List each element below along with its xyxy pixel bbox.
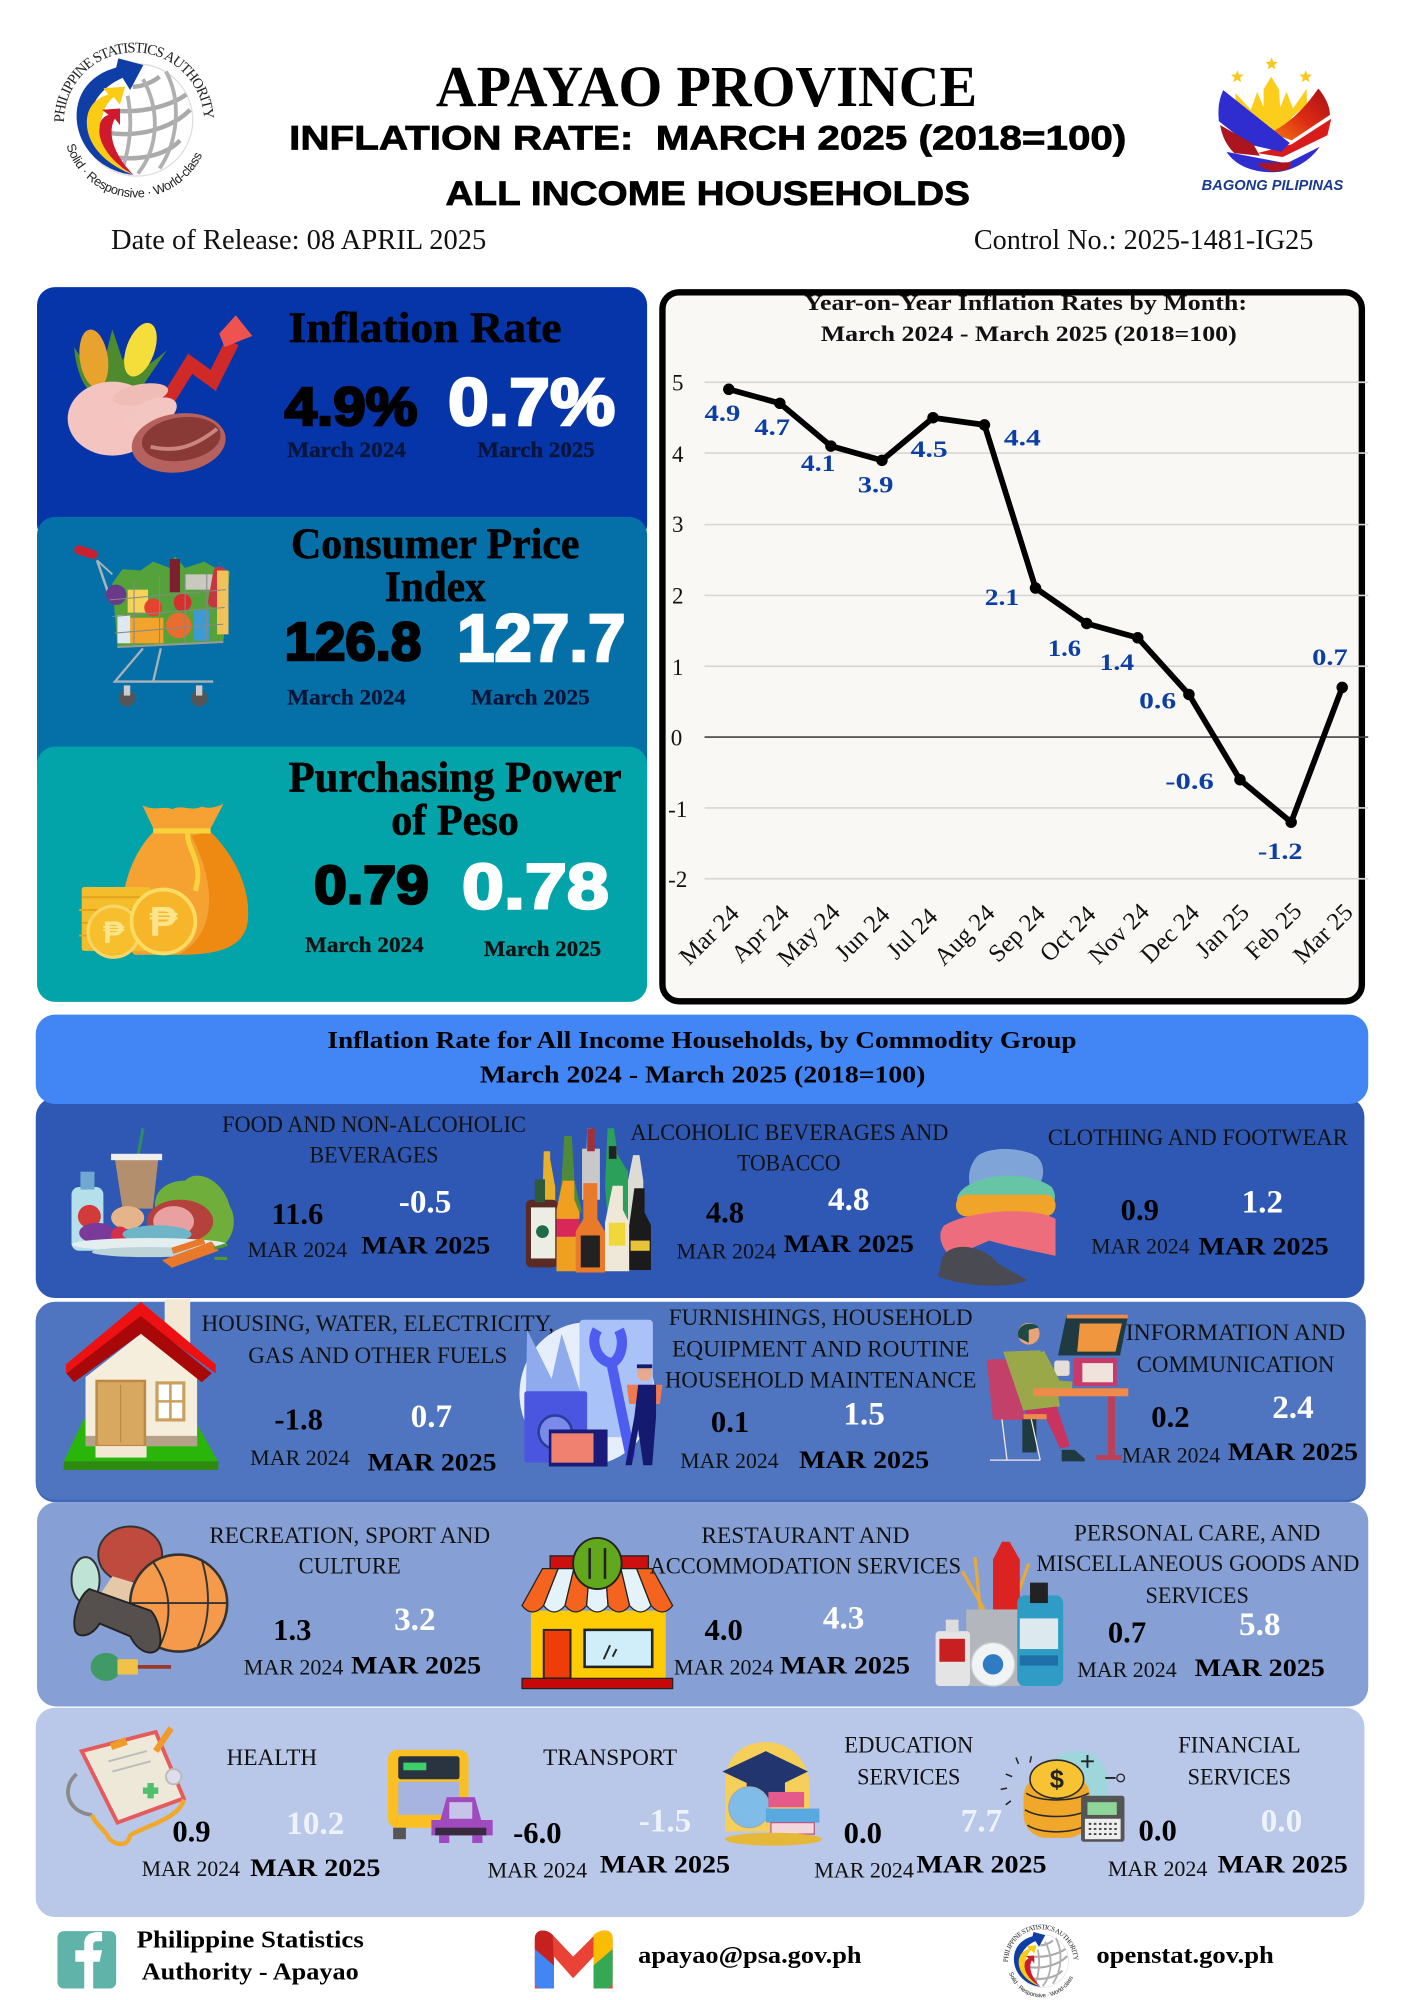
y axis labels (668, 371, 687, 892)
email text: apayao@psa.gov.ph (638, 1942, 862, 1969)
icon: clothes stack and shoes (938, 1149, 1056, 1286)
label 2024: MAR 2024 (680, 1449, 779, 1473)
label 2025: MAR 2025 (351, 1650, 481, 1679)
y axis labels: -2 (668, 867, 687, 892)
label: FURNISHINGS, HOUSEHOLD (669, 1305, 973, 1330)
data labels: 4.1 (801, 451, 835, 476)
value 2024: 1.3 (273, 1613, 311, 1647)
heading: of Peso (391, 797, 519, 845)
icon: food with rising arrow (68, 315, 252, 479)
x axis labels: Feb 25 (1240, 898, 1307, 965)
x axis labels: Oct 24 (1035, 900, 1102, 967)
commodity: food and non-alcoholic beverages (71, 1112, 526, 1265)
value 2024: 0.9 (1121, 1193, 1159, 1227)
footer: website (1003, 1924, 1274, 1998)
label 2025: MAR 2025 (1198, 1232, 1329, 1261)
panel: purchasing power of peso (37, 747, 647, 1002)
icon: clipboard and stethoscope (68, 1728, 184, 1844)
data labels: 4.4 (1004, 425, 1042, 450)
label 2025: MAR 2025 (799, 1445, 929, 1474)
x axis labels (674, 898, 1359, 972)
label: SERVICES (857, 1764, 960, 1789)
label 2024: MAR 2024 (674, 1656, 774, 1680)
label: EQUIPMENT AND ROUTINE (672, 1337, 969, 1362)
logo: PSA small: Solid · Responsive · World-class (1010, 1972, 1073, 1998)
label (650, 1523, 961, 1579)
panel: inflation rate (37, 287, 647, 542)
label: March 2024: March 2024 (287, 438, 406, 462)
footer: email (535, 1931, 862, 1989)
icon: coins and calculator: $ (1050, 1766, 1064, 1794)
commodity: personal care and miscellaneous (936, 1521, 1359, 1686)
label (202, 1311, 554, 1368)
footer text: Authority - Apayao (142, 1959, 359, 1986)
value 2025: 0.0 (1261, 1803, 1302, 1840)
x axis labels: Jun 24 (830, 901, 896, 967)
label 2025: MAR 2025 (1195, 1653, 1325, 1682)
logo: PSA small: PHILIPPINE STATISTICS AUTHORITY (1003, 1924, 1078, 1962)
data labels: -0.6 (1165, 769, 1214, 794)
label 2025: MAR 2025 (780, 1650, 910, 1679)
label (1126, 1320, 1345, 1377)
data labels: 0.6 (1139, 688, 1176, 713)
icon: bottles (526, 1128, 651, 1272)
value 2024: 11.6 (271, 1197, 323, 1231)
icon: restaurant storefront (522, 1538, 673, 1689)
chart title: Year-on-Year Inflation Rates by Month: (804, 290, 1247, 315)
label 2024: MAR 2024 (676, 1239, 776, 1263)
icon: shopping cart (73, 544, 230, 706)
x axis labels: May 24 (772, 898, 846, 972)
label 2024: MAR 2024 (1091, 1234, 1190, 1258)
label 2024: MAR 2024 (248, 1238, 347, 1262)
label 2025: MAR 2025 (361, 1230, 490, 1259)
commodity: alcoholic beverages and tobacco (526, 1120, 948, 1272)
commodity: health (68, 1728, 380, 1882)
y axis labels: 4 (672, 442, 684, 467)
footer text (137, 1927, 364, 1986)
label 2025: MAR 2025 (1228, 1437, 1358, 1466)
value: March 2024: 4.9% (285, 377, 417, 437)
label: FOOD AND NON-ALCOHOLIC (222, 1112, 526, 1137)
y axis labels: -1 (668, 797, 687, 822)
label: RECREATION, SPORT AND (209, 1523, 490, 1548)
value 2025: 5.8 (1239, 1606, 1280, 1643)
label: GAS AND OTHER FUELS (248, 1343, 507, 1368)
label: FINANCIAL (1178, 1732, 1301, 1757)
label: EDUCATION (844, 1732, 974, 1757)
data labels (705, 401, 1348, 864)
label: March 2025: March 2025 (484, 937, 601, 961)
value 2024: 0.0 (1139, 1813, 1177, 1847)
heading: Inflation Rate (288, 304, 562, 352)
label (222, 1112, 526, 1168)
data labels: 0.7 (1312, 645, 1348, 670)
label 2025: MAR 2025 (1218, 1849, 1348, 1878)
data line (723, 384, 1348, 828)
section header (36, 1015, 1368, 1104)
label (209, 1523, 490, 1579)
label: COMMUNICATION (1137, 1352, 1335, 1377)
label: SERVICES (1146, 1583, 1249, 1608)
icon: money bag with coins: ₱ (149, 898, 178, 945)
label 2025: MAR 2025 (784, 1229, 914, 1258)
chart title (804, 290, 1247, 346)
label 2024: MAR 2024 (1122, 1444, 1220, 1468)
x axis labels: Aug 24 (929, 899, 1001, 971)
icon: bus and car (388, 1750, 493, 1843)
heading: Index (385, 563, 486, 611)
value 2024: 4.8 (706, 1196, 744, 1230)
subtitle: all income households: ALL INCOME HOUSEHOLDS (445, 175, 970, 213)
label: SERVICES (1188, 1764, 1291, 1789)
data labels: -1.2 (1258, 839, 1303, 864)
icon: person at desk (987, 1315, 1128, 1461)
icon: graduation cap and books (722, 1742, 822, 1846)
commodity: housing, water, electricity (64, 1299, 554, 1476)
value 2025: 4.3 (823, 1600, 864, 1637)
y axis labels: 1 (672, 655, 683, 680)
footer text: Philippine Statistics (137, 1927, 364, 1954)
label: TOBACCO (737, 1150, 840, 1175)
value 2024: 0.7 (1108, 1616, 1146, 1650)
x axis labels: Jan 25 (1190, 899, 1255, 964)
icon: food plate and drink (71, 1128, 234, 1265)
x axis labels: Sep 24 (983, 900, 1051, 968)
logo: Philippine Statistics Authority (54, 42, 214, 198)
control number: Control No.: 2025-1481-IG25 (974, 225, 1313, 256)
release date: Date of Release: 08 APRIL 2025 (111, 225, 486, 256)
icon: appliances and repairman (519, 1320, 662, 1466)
icon: facebook (57, 1931, 116, 1989)
x axis labels: Dec 24 (1136, 899, 1205, 969)
commodity: recreation, sport and culture (71, 1523, 490, 1681)
chart title: March 2024 - March 2025 (2018=100) (821, 321, 1237, 346)
label: MISCELLANEOUS GOODS AND (1036, 1551, 1359, 1576)
value 2025: 1.2 (1242, 1184, 1283, 1221)
x axis labels: Nov 24 (1083, 898, 1155, 970)
value 2024: 4.0 (705, 1613, 743, 1647)
label (1178, 1732, 1301, 1789)
value 2024: -1.8 (274, 1402, 323, 1436)
y axis labels: 0 (671, 725, 682, 750)
data labels: 4.9 (705, 401, 740, 426)
panel: commodity row 3 background (37, 1502, 1368, 1706)
panel: commodity row 4 background (36, 1708, 1364, 1917)
label 2025: MAR 2025 (600, 1849, 730, 1878)
value 2025: 4.8 (828, 1181, 870, 1218)
label: HOUSING, WATER, ELECTRICITY, (202, 1311, 554, 1336)
label: RESTAURANT AND (701, 1523, 909, 1548)
label: March 2025: March 2025 (477, 438, 595, 462)
label 2024: MAR 2024 (250, 1446, 350, 1470)
value 2024: -6.0 (513, 1816, 562, 1850)
section header: March 2024 - March 2025 (2018=100) (480, 1061, 925, 1088)
website text: openstat.gov.ph (1096, 1942, 1274, 1969)
commodity: transport (388, 1745, 730, 1882)
heading (291, 520, 579, 611)
panel: commodity row 2 fill (36, 1302, 1366, 1500)
title: APAYAO PROVINCE (436, 54, 977, 119)
data labels: 3.9 (858, 473, 893, 498)
value 2025: -0.5 (399, 1184, 451, 1221)
data labels: 1.4 (1100, 650, 1135, 675)
label 2024: MAR 2024 (142, 1857, 240, 1881)
label (665, 1305, 976, 1392)
commodity: furnishings, household equipment (519, 1305, 976, 1474)
icon: house (64, 1299, 218, 1470)
label (844, 1732, 974, 1789)
subtitle: inflation rate: INFLATION RATE: MARCH 2025 (2018=100) (289, 119, 1126, 157)
label 2025: MAR 2025 (368, 1447, 497, 1476)
footer: facebook (57, 1927, 364, 1989)
icon: coins and calculator (1001, 1751, 1124, 1842)
label: CLOTHING AND FOOTWEAR (1048, 1125, 1348, 1150)
section header: Inflation Rate for All Income Households, by Commodity Group (327, 1027, 1077, 1054)
panel: year-on-year line chart (662, 290, 1368, 1001)
y axis labels: 2 (672, 584, 683, 609)
value: March 2024: 0.79 (314, 856, 429, 916)
commodity: financial services (1001, 1732, 1348, 1881)
value: March 2025: 127.7 (457, 602, 625, 676)
label 2025: MAR 2025 (250, 1853, 380, 1882)
commodity: information and communication (987, 1315, 1358, 1468)
icon: toiletries (936, 1542, 1063, 1686)
label: March 2024: March 2024 (305, 933, 424, 957)
logo: Bagong Pilipinas (1202, 57, 1344, 194)
value 2025: 2.4 (1272, 1389, 1314, 1426)
label: PERSONAL CARE, AND (1074, 1521, 1320, 1546)
data labels: 1.6 (1048, 636, 1081, 661)
icon: gmail (535, 1931, 613, 1989)
icon: money bag with coins: ₱ (103, 914, 125, 950)
value: March 2025: 0.78 (462, 851, 609, 923)
label: TRANSPORT (543, 1745, 677, 1770)
panel: commodity row 2 background (36, 1302, 1366, 1502)
logo: Bagong Pilipinas: BAGONG PILIPINAS (1202, 178, 1344, 194)
value 2025: 10.2 (286, 1805, 344, 1842)
label 2024: MAR 2024 (1077, 1658, 1177, 1682)
label: March 2024: March 2024 (287, 686, 406, 710)
logo: PSA small (1003, 1924, 1078, 1998)
commodity: restaurant and accommodation (522, 1523, 961, 1689)
label: ALCOHOLIC BEVERAGES AND (631, 1120, 948, 1145)
icon: money bag with coins (79, 804, 248, 957)
value: March 2024: 126.8 (285, 612, 421, 672)
label: ACCOMMODATION SERVICES (650, 1554, 961, 1579)
value 2025: 1.5 (843, 1395, 885, 1432)
icon: sports and games (71, 1526, 227, 1681)
heading (288, 753, 622, 845)
label: CULTURE (299, 1554, 401, 1579)
data labels: 2.1 (985, 585, 1019, 610)
value 2025: 3.2 (394, 1601, 436, 1638)
x axis labels: Mar 24 (674, 900, 745, 971)
y axis labels: 5 (672, 371, 683, 396)
value 2024: 0.0 (844, 1816, 882, 1850)
data labels: 4.5 (911, 437, 948, 462)
panel: consumer price index (37, 517, 647, 798)
value 2025: 0.7 (411, 1398, 452, 1435)
logo: Philippine Statistics Authority: PHILIPPINE STATISTICS AUTHORITY (54, 42, 214, 122)
label: HEALTH (227, 1745, 317, 1770)
commodity: clothing and footwear (938, 1125, 1348, 1286)
logo: Philippine Statistics Authority: Solid · Responsive · World-class (67, 144, 202, 198)
heading: Purchasing Power (288, 753, 622, 801)
y axis labels: 3 (672, 512, 683, 537)
label 2024: MAR 2024 (1108, 1857, 1208, 1881)
label: HOUSEHOLD MAINTENANCE (665, 1367, 976, 1392)
label 2024: MAR 2024 (814, 1858, 914, 1882)
value 2024: 0.2 (1151, 1400, 1190, 1434)
label 2024: MAR 2024 (488, 1858, 587, 1882)
value 2025: -1.5 (639, 1803, 691, 1840)
value 2025: 7.7 (961, 1803, 1002, 1840)
heading: Consumer Price (291, 520, 579, 568)
label (631, 1120, 948, 1175)
commodity: education services (722, 1732, 1047, 1882)
label 2025: MAR 2025 (916, 1849, 1047, 1878)
x axis labels: Apr 24 (726, 899, 795, 968)
x axis labels: Jul 24 (882, 903, 944, 965)
panel: commodity row 1 background (36, 1098, 1364, 1298)
x axis labels: Mar 25 (1288, 899, 1359, 969)
label 2024: MAR 2024 (244, 1656, 344, 1680)
value: March 2025: 0.7% (448, 366, 615, 440)
data labels: 4.7 (754, 415, 790, 440)
label: INFORMATION AND (1126, 1320, 1345, 1345)
label (1036, 1521, 1359, 1608)
label: March 2025: March 2025 (471, 686, 590, 710)
value 2024: 0.9 (172, 1815, 211, 1849)
value 2024: 0.1 (711, 1405, 749, 1439)
label: BEVERAGES (310, 1143, 438, 1168)
